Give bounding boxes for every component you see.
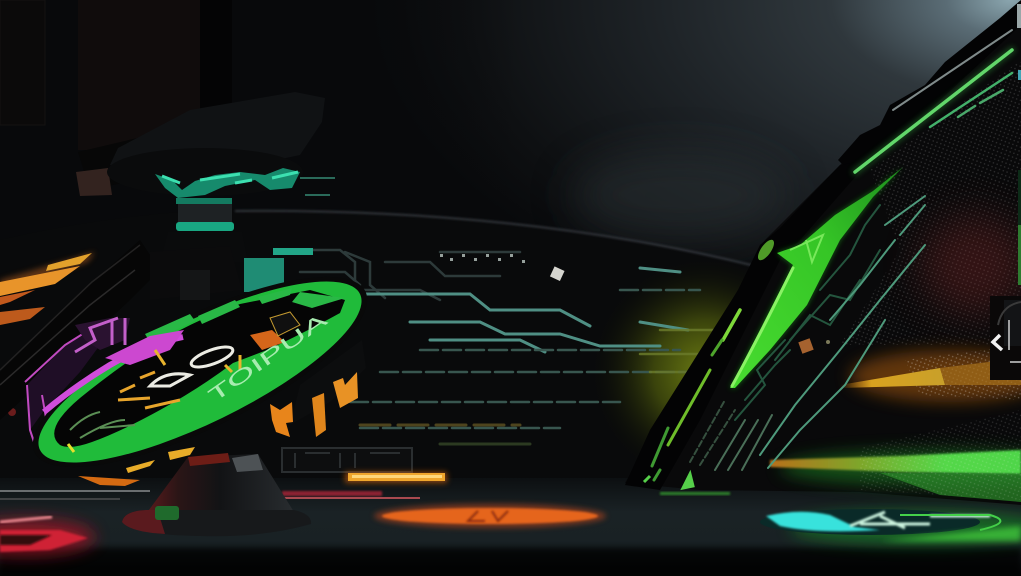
stepped panel edge [625, 0, 1021, 490]
right edge widget with chevron [990, 4, 1021, 380]
left orange neon bars [0, 252, 95, 416]
small orange chip [798, 338, 830, 354]
panel circuit traces [690, 196, 925, 470]
disc stand [122, 453, 311, 536]
upper left machinery silhouette [0, 0, 232, 196]
glowing floor disc: red [0, 517, 95, 555]
disc rim [10, 241, 390, 503]
green energy blade [644, 167, 903, 495]
disc black face [54, 290, 345, 447]
magenta circuit frame [25, 318, 130, 445]
glowing floor disc: cyan and green [760, 509, 1021, 544]
disc magenta arc [44, 337, 183, 412]
tilted green disc [10, 241, 390, 503]
disc top edge green segments [145, 288, 345, 342]
disc lettering: TOIPUA [205, 309, 332, 407]
upper hub and spindle [107, 92, 335, 300]
disc underside fins [78, 340, 366, 486]
panel neon lines [652, 30, 1012, 480]
disc central emblem [68, 312, 300, 452]
circuit traces on backdrop [290, 250, 720, 444]
curved circuit board backdrop [0, 209, 820, 487]
glowing floor disc: orange [374, 504, 606, 528]
right perforated panel [625, 20, 1021, 505]
floor [0, 478, 1021, 576]
lower chip block outline [282, 448, 412, 472]
left circuit arm [0, 240, 160, 420]
floor light streaks [0, 472, 447, 500]
